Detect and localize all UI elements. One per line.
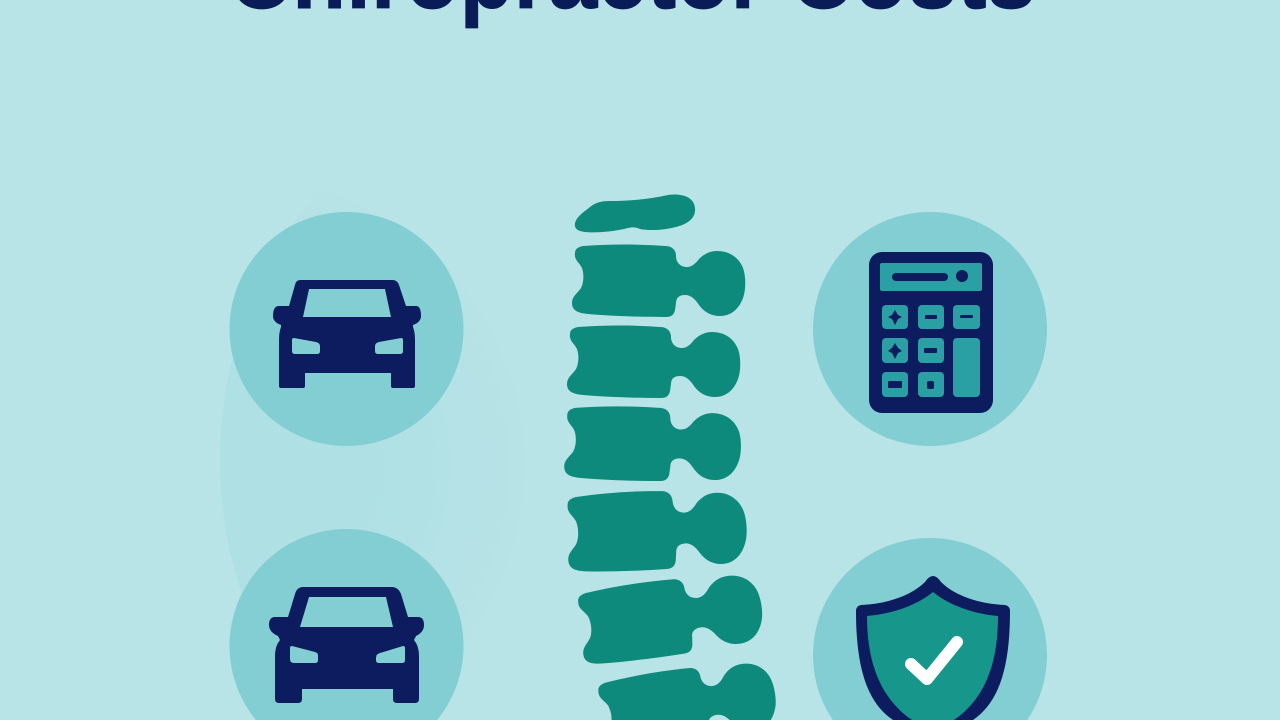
calculator screen xyxy=(880,263,982,291)
vertebra 4 xyxy=(564,484,749,576)
vertebra cap xyxy=(575,195,695,232)
vertebra 6 xyxy=(594,652,781,720)
spine illustration xyxy=(564,195,781,720)
vertebra 5 xyxy=(574,565,767,669)
calculator keys xyxy=(882,305,980,397)
panel: shield icon xyxy=(813,538,1047,720)
calculator body xyxy=(869,252,993,413)
panel: car icon top xyxy=(230,212,464,446)
vertebra 3 xyxy=(564,406,741,481)
shield outline xyxy=(856,576,1010,720)
check mark xyxy=(911,642,957,679)
vertebra 2 xyxy=(567,326,740,398)
shield fill xyxy=(867,592,998,720)
vertebra 1 xyxy=(572,244,745,317)
panel: calculator icon xyxy=(813,212,1047,446)
panel: car icon bottom xyxy=(230,529,464,720)
